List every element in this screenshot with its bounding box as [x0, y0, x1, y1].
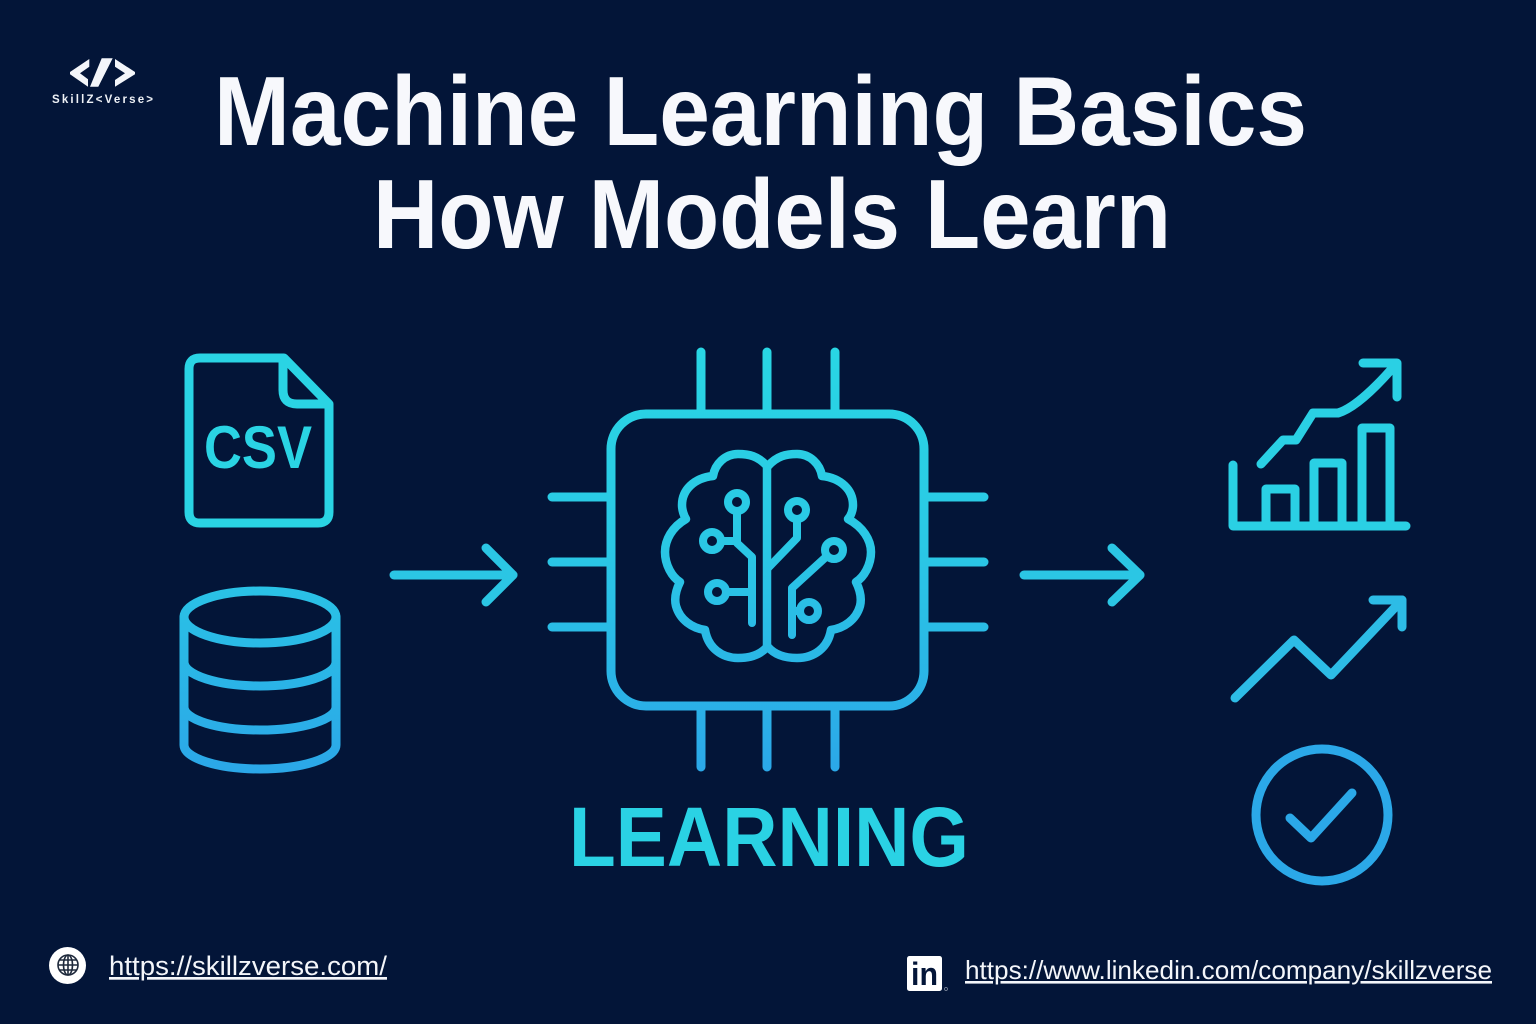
title	[214, 56, 1307, 269]
icon: CSV file	[189, 358, 329, 523]
LinkedIn link	[907, 955, 1492, 992]
icon: globe	[49, 947, 86, 984]
logo wordmark: SkillZ<Verse>	[52, 94, 153, 106]
brain outline	[665, 454, 871, 658]
chip body	[611, 414, 924, 706]
website link	[49, 947, 388, 984]
icon: trend line	[1235, 600, 1402, 698]
logo: SkillZ Verse	[52, 58, 153, 106]
logo icon: code brackets	[70, 58, 135, 87]
label: LEARNING: LEARNING	[569, 790, 969, 884]
icon: AI chip	[552, 352, 984, 767]
arrow: learning to output	[1024, 548, 1140, 602]
website URL: https://skillzverse.com/	[109, 951, 388, 981]
icon: LinkedIn: in	[911, 956, 938, 992]
CSV label: CSV	[204, 414, 312, 481]
arrow: input to learning	[394, 548, 513, 602]
icon: database	[184, 591, 336, 769]
title line 1: Machine Learning Basics	[214, 56, 1307, 166]
icon: bar chart with growth arrow	[1233, 363, 1406, 526]
brain circuits	[703, 493, 843, 635]
icon: check circle	[1256, 749, 1388, 881]
LinkedIn URL: https://www.linkedin.com/company/skillzverse	[965, 955, 1492, 985]
title line 2: How Models Learn	[373, 159, 1171, 269]
chip pins	[552, 352, 984, 767]
